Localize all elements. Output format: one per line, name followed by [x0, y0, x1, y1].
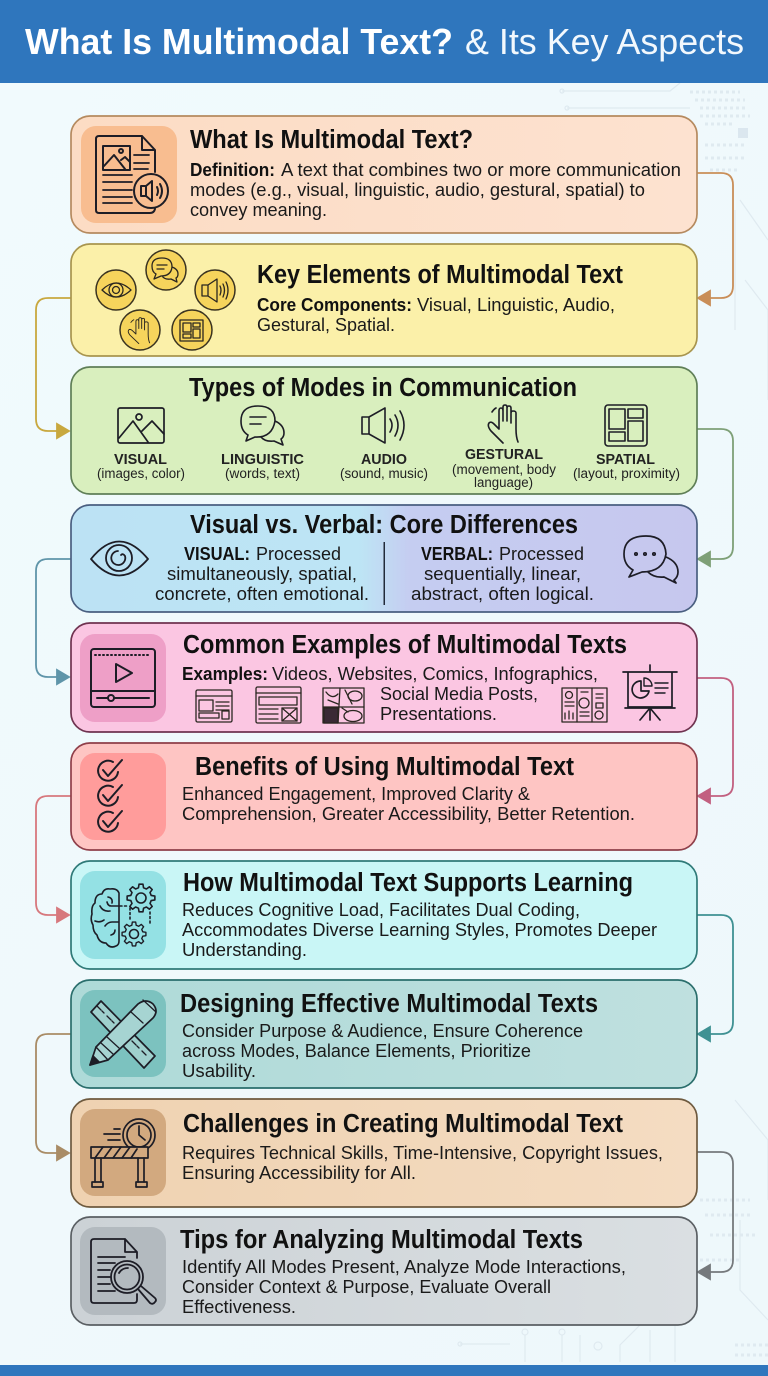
heading: Tips for Analyzing Multimodal Texts: [180, 1226, 583, 1254]
panel: What Is Multimodal Text?: [71, 116, 697, 233]
body text: Core Components:: [257, 295, 412, 315]
arrow: card 7 to card 8: [697, 915, 733, 1041]
definition text: [190, 160, 681, 220]
heading: Visual vs. Verbal: Core Differences: [190, 511, 578, 539]
body text: [257, 295, 615, 335]
examples text: Presentations.: [380, 704, 497, 724]
mode: spatial: (layout, proximity): [573, 466, 680, 481]
body text: Usability.: [182, 1061, 256, 1081]
heading: Key Elements of Multimodal Text: [257, 261, 623, 289]
panel: Challenges: [71, 1099, 697, 1207]
body text: [182, 1021, 583, 1081]
icon: comic panels: [323, 688, 364, 723]
body text: Gestural, Spatial.: [257, 315, 395, 335]
mode: audio: (sound, music): [340, 466, 428, 481]
body text: [182, 1143, 663, 1183]
verbal column: abstract, often logical.: [411, 584, 594, 604]
heading: How Multimodal Text Supports Learning: [183, 869, 633, 897]
arrow: card 5 to card 6: [697, 678, 733, 803]
verbal column: VERBAL:: [421, 544, 493, 564]
body text: Enhanced Engagement, Improved Clarity &: [182, 784, 530, 804]
arrow: card 8 to card 9: [36, 1034, 71, 1160]
panel: Benefits: [71, 743, 697, 850]
panel: Types of Modes: [71, 367, 697, 494]
body text: [182, 900, 657, 960]
verbal column: sequentially, linear,: [424, 564, 581, 584]
circuit pattern bottom right: [458, 1100, 768, 1362]
icon: website layout: [196, 690, 232, 722]
definition text: A text that combines two or more communication: [281, 160, 681, 180]
mode: visual: VISUAL: [114, 451, 167, 468]
panel: Supports Learning: [71, 861, 697, 969]
body text: Reduces Cognitive Load, Facilitates Dual Coding,: [182, 900, 580, 920]
icon: ruler and pencil: [90, 1000, 156, 1068]
visual column: Processed: [256, 544, 341, 564]
icon: document with speaker: [96, 136, 168, 213]
examples text: Videos, Websites, Comics, Infographics,: [272, 664, 598, 684]
mode: spatial: [573, 405, 680, 481]
body text: Understanding.: [182, 940, 307, 960]
body text: Effectiveness.: [182, 1297, 296, 1317]
heading: Types of Modes in Communication: [189, 374, 577, 402]
arrow: card 4 to card 5: [36, 559, 71, 684]
mode: linguistic: (words, text): [225, 466, 300, 481]
mode: visual: [97, 408, 185, 481]
icon: speech bubbles: [624, 536, 678, 583]
mode: audio: AUDIO: [361, 451, 407, 468]
panel: Key Elements: [71, 244, 697, 356]
arrow: card 9 to card 10: [697, 1152, 733, 1279]
panel: Designing: [71, 980, 697, 1088]
body text: Comprehension, Greater Accessibility, Better Retention.: [182, 804, 635, 824]
examples text: Examples:: [182, 664, 268, 684]
header banner: [0, 0, 768, 83]
visual column: VISUAL:: [184, 544, 250, 564]
mode: linguistic: [221, 406, 304, 481]
icon: barrier and clock: [91, 1119, 155, 1187]
heading: Challenges in Creating Multimodal Text: [183, 1110, 623, 1138]
icon: check list: [98, 760, 122, 832]
arrow: card 6 to card 7: [36, 796, 71, 922]
body text: across Modes, Balance Elements, Prioritize: [182, 1041, 531, 1061]
body text: [182, 784, 635, 824]
mode: linguistic: LINGUISTIC: [221, 451, 304, 468]
examples text: [182, 664, 598, 724]
icon: presentation board: [623, 665, 677, 720]
mode: gestural: GESTURAL: [465, 446, 543, 463]
footer bar: [0, 1365, 768, 1376]
arrow: card 2 to card 3: [36, 298, 71, 438]
examples text: Social Media Posts,: [380, 684, 538, 704]
icon cluster: five modes: [96, 250, 235, 350]
body text: Consider Context & Purpose, Evaluate Overall: [182, 1277, 551, 1297]
body text: Visual, Linguistic, Audio,: [417, 295, 615, 315]
icon: infographic: [562, 688, 607, 722]
title: & Its Key Aspects: [465, 21, 744, 62]
mode: audio: [340, 408, 428, 481]
definition text: modes (e.g., visual, linguistic, audio, gestural, spatial) to: [190, 180, 645, 200]
body text: Consider Purpose & Audience, Ensure Coherence: [182, 1021, 583, 1041]
icon: browser window: [256, 687, 301, 723]
mode: gestural: language): [474, 475, 533, 490]
definition text: convey meaning.: [190, 200, 327, 220]
divider: [384, 542, 385, 605]
mode: gestural: [452, 405, 556, 490]
heading: Common Examples of Multimodal Texts: [183, 631, 627, 659]
body text: Ensuring Accessibility for All.: [182, 1163, 416, 1183]
definition text: Definition:: [190, 160, 275, 180]
icon: eye: [91, 542, 148, 576]
heading: Designing Effective Multimodal Texts: [180, 990, 598, 1018]
icon: brain and gears: [91, 884, 155, 947]
title: [25, 21, 744, 62]
arrow: card 1 to card 2: [697, 173, 733, 305]
title: What Is Multimodal Text?: [25, 21, 453, 62]
heading: What Is Multimodal Text?: [190, 126, 473, 154]
panel: Visual vs. Verbal: [71, 505, 697, 612]
heading: Benefits of Using Multimodal Text: [195, 753, 574, 781]
body text: Identify All Modes Present, Analyze Mode Interactions,: [182, 1257, 626, 1277]
icon: document and magnifier: [91, 1239, 156, 1304]
icon: video player: [91, 649, 155, 707]
body text: Accommodates Diverse Learning Styles, Promotes Deeper: [182, 920, 657, 940]
verbal column: Processed: [499, 544, 584, 564]
panel: Common Examples: [71, 623, 697, 732]
body text: [182, 1257, 626, 1317]
arrow: card 3 to card 4: [697, 429, 733, 566]
verbal column: [411, 544, 594, 604]
visual column: [155, 544, 369, 604]
panel: Tips: [71, 1217, 697, 1325]
mode: visual: (images, color): [97, 466, 185, 481]
mode: gestural: (movement, body: [452, 462, 556, 477]
mode: spatial: SPATIAL: [596, 451, 655, 468]
visual column: concrete, often emotional.: [155, 584, 369, 604]
body text: Requires Technical Skills, Time-Intensive, Copyright Issues,: [182, 1143, 663, 1163]
visual column: simultaneously, spatial,: [167, 564, 357, 584]
circuit pattern top right: [560, 83, 768, 400]
